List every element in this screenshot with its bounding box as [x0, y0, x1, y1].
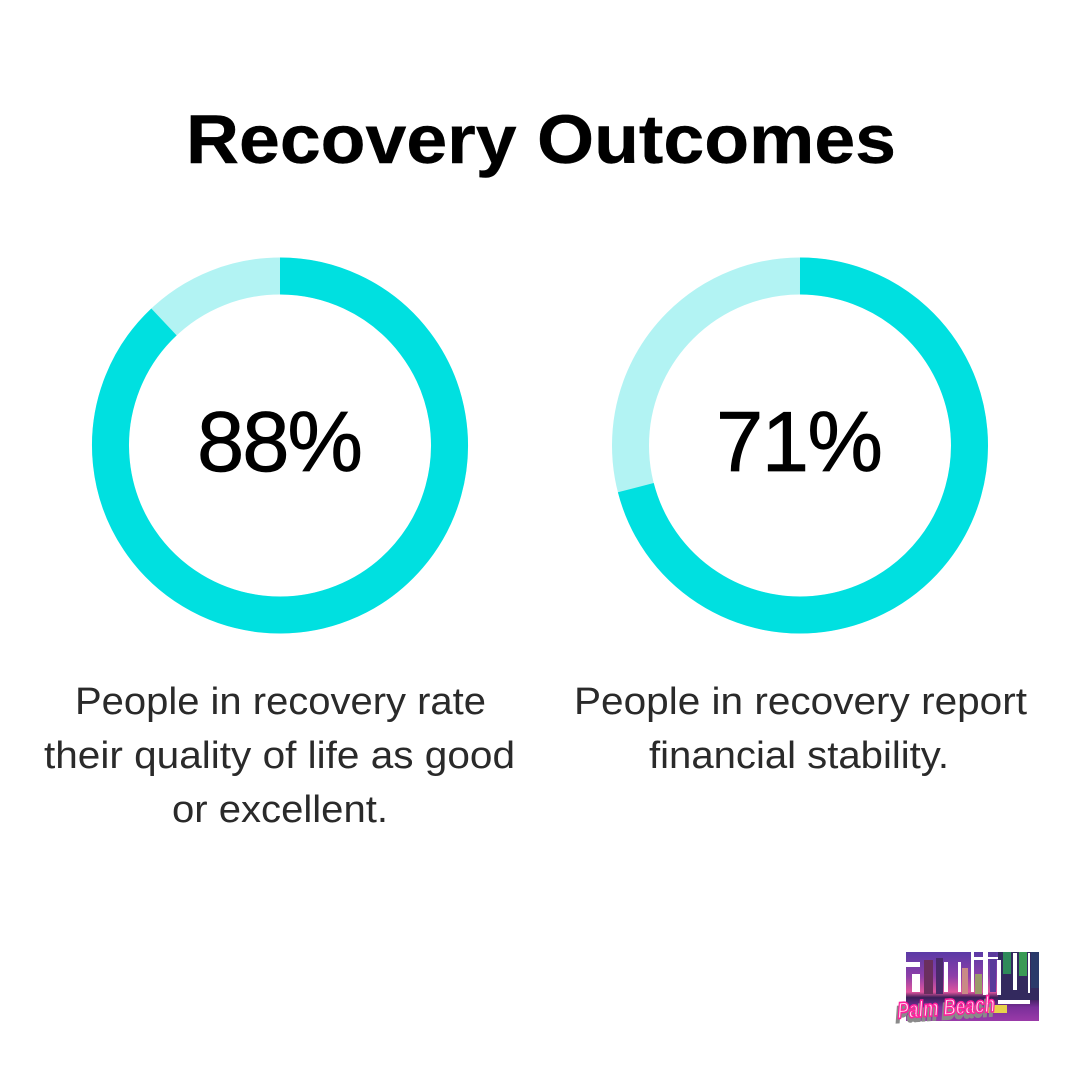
title: Recovery Outcomes [186, 101, 896, 178]
description: quality of life [44, 681, 515, 831]
description: financial stability: financial stability. [649, 735, 949, 777]
description: financial stability [574, 681, 1027, 777]
white letter gaps [906, 952, 1030, 1004]
panel: 88% quality of life [44, 276, 515, 831]
description: quality of life: or excellent. [172, 789, 388, 831]
value: 88%: 88% [197, 395, 363, 490]
Palm Beach script: Palm Beach [895, 995, 994, 1028]
description: quality of life: their quality of life as good [44, 735, 515, 777]
donut chart: 88% [110, 276, 450, 615]
logo: Amity Palm Beach [894, 952, 1039, 1028]
value: 71%: 71% [716, 395, 883, 490]
panel: 71% financial stability [574, 276, 1027, 777]
donut chart: 71% [630, 276, 970, 615]
description: financial stability: People in recovery report [574, 681, 1027, 723]
Palm Beach script: Palm Beach [896, 991, 996, 1023]
description: quality of life: People in recovery rate [75, 681, 486, 723]
